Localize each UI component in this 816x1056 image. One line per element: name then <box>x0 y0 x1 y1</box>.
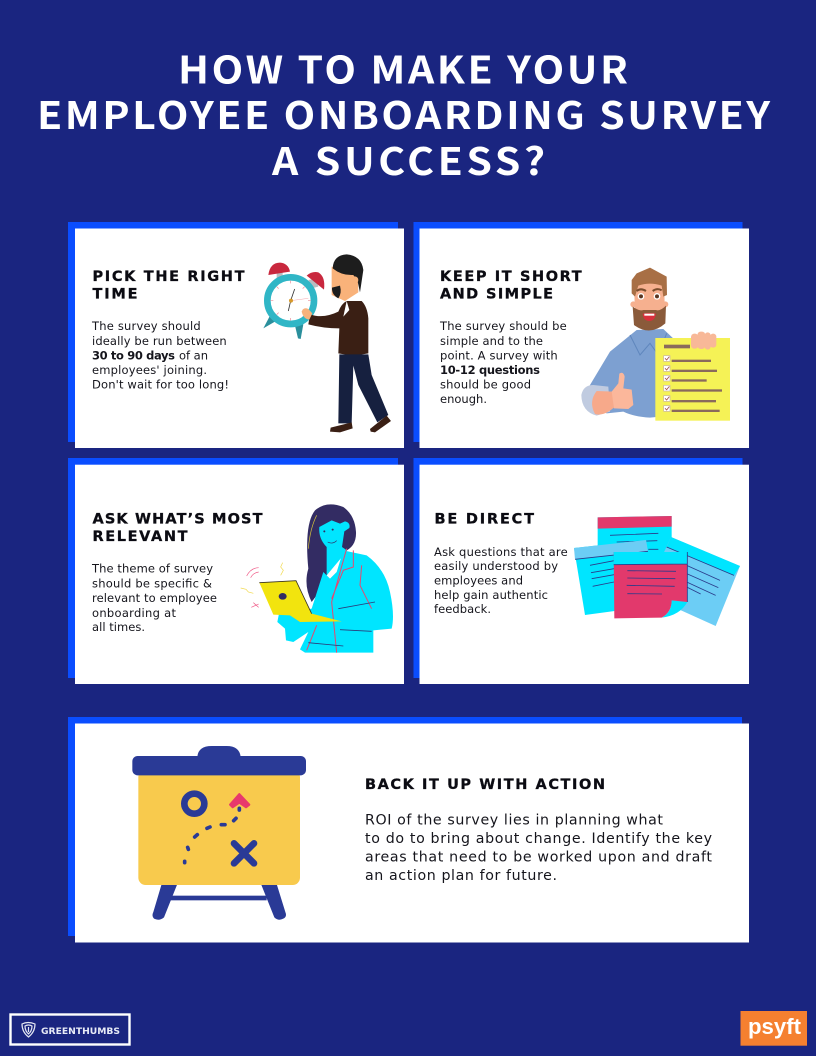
text: keep it short <box>439 319 567 406</box>
illustration: man holding alarm clock <box>263 254 391 432</box>
logo: greenthumbs: GREENTHUMBS <box>41 1026 120 1037</box>
panel: be direct <box>414 458 749 684</box>
icon: fingerprint shield <box>22 1022 35 1037</box>
text: ask what's most relevant: should be specific & <box>92 576 212 590</box>
text: keep it short: The survey should be <box>439 319 567 333</box>
text: pick the right time: of an <box>179 348 208 362</box>
illustration: man with checklist and thumbs up <box>581 268 730 421</box>
title: EMPLOYEE ONBOARDING SURVEY <box>37 86 771 141</box>
heading: be direct: BE DIRECT <box>434 512 534 528</box>
logo: psyft: psyft <box>748 1014 802 1039</box>
heading: ask what's most relevant <box>92 512 263 545</box>
text: be direct: Ask questions that are <box>434 545 568 559</box>
panel: pick the right time <box>68 222 404 448</box>
heading: keep it short: AND SIMPLE <box>440 286 553 302</box>
text: keep it short: point. A survey with <box>440 348 558 362</box>
text: back it up with action: ROI of the survey lies in planning what <box>365 812 663 828</box>
text: back it up with action <box>365 812 712 884</box>
text: ask what's most relevant: relevant to employee <box>92 591 217 605</box>
heading: keep it short <box>440 269 582 302</box>
text: ask what's most relevant: all times. <box>92 620 145 634</box>
title <box>37 40 771 187</box>
heading: ask what's most relevant: RELEVANT <box>92 529 188 545</box>
text: back it up with action: areas that need to be worked upon and draft <box>365 850 712 866</box>
heading: pick the right time: PICK THE RIGHT <box>92 269 245 285</box>
text: pick the right time: Don't wait for too long! <box>92 377 229 391</box>
text: pick the right time: The survey should <box>91 319 201 333</box>
text: ask what's most relevant: onboarding at <box>92 606 176 620</box>
text: be direct <box>434 545 568 616</box>
text: keep it short: simple and to the <box>440 334 543 348</box>
title: HOW TO MAKE YOUR <box>178 40 628 95</box>
text: pick the right time <box>91 319 229 391</box>
heading: keep it short: KEEP IT SHORT <box>440 269 582 285</box>
text: back it up with action: an action plan for future. <box>365 868 557 884</box>
text: be direct: help gain authentic <box>434 588 548 602</box>
text: pick the right time: 30 to 90 days <box>92 348 175 362</box>
text: be direct: feedback. <box>434 602 491 616</box>
panel: ask what's most relevant <box>68 458 404 684</box>
illustration: woman with laptop <box>241 504 393 653</box>
heading: pick the right time <box>92 269 245 302</box>
text: keep it short: enough. <box>440 392 487 406</box>
text: keep it short: should be good <box>440 377 531 391</box>
text: pick the right time: employees' joining. <box>92 363 207 377</box>
text: ask what's most relevant <box>91 562 217 634</box>
logo: psyft <box>740 1011 807 1046</box>
heading: pick the right time: TIME <box>92 286 138 302</box>
text: be direct: employees and <box>434 573 523 587</box>
text: ask what's most relevant: The theme of survey <box>91 562 213 576</box>
illustration: strategy board <box>132 746 306 920</box>
text: keep it short: 10-12 questions <box>440 363 540 377</box>
illustration: sticky notes <box>574 516 740 626</box>
text: be direct: easily understood by <box>434 559 558 573</box>
heading: ask what's most relevant: ASK WHAT’S MOST <box>92 512 263 528</box>
text: pick the right time: ideally be run between <box>92 334 227 348</box>
heading: back it up with action: BACK IT UP WITH ACTION <box>365 777 605 793</box>
panel: keep it short and simple <box>414 222 749 448</box>
text: back it up with action: to do to bring about change. Identify the key <box>365 831 712 847</box>
panel: back it up with action <box>68 717 749 942</box>
logo: greenthumbs <box>10 1014 130 1044</box>
title: A SUCCESS? <box>271 132 545 187</box>
